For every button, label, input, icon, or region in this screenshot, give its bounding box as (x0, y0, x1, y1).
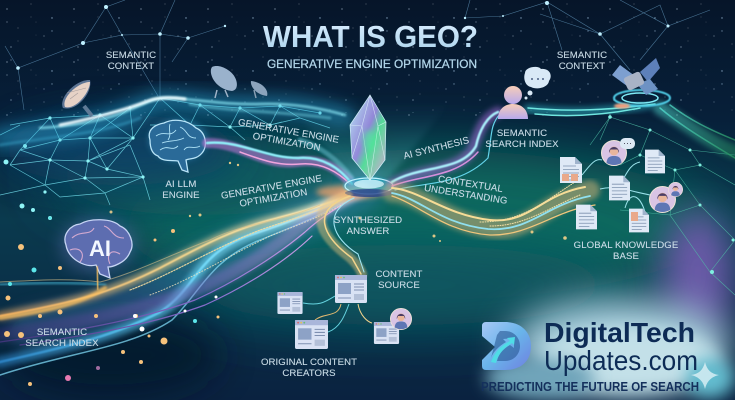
label: semantic context left: SEMANTIC (106, 50, 156, 61)
label: contextual understanding: UNDERSTANDING (423, 183, 508, 207)
label: AI LLM engine: ENGINE (162, 190, 200, 201)
icon: satellite dish centre (211, 66, 237, 98)
central beam (286, 100, 452, 180)
label: semantic search index left: SEARCH INDEX (25, 338, 99, 349)
icon: avatar small (668, 182, 683, 197)
icon: LLM brain (148, 118, 208, 172)
document 1 (560, 157, 582, 183)
icon: documents cluster (560, 150, 665, 232)
label: content source: CONTENT (375, 269, 423, 280)
label: AI LLM engine: AI LLM (166, 179, 196, 190)
icon: user with speech bubble (498, 67, 551, 119)
stream: centre to content sources (321, 196, 364, 274)
label: original content creators: CREATORS (282, 368, 336, 379)
label: generative engine optimization lower: GENERATIVE ENGINE (220, 173, 323, 202)
label: semantic search index left: SEMANTIC (37, 327, 87, 338)
icon: satellite dish right (251, 81, 267, 98)
label: semantic context right: CONTEXT (559, 61, 605, 72)
logo mark (482, 322, 531, 370)
document 5 (629, 209, 649, 232)
icon: avatar man (650, 187, 675, 212)
label: global knowledge base: GLOBAL KNOWLEDGE (574, 240, 678, 251)
icon: window left (277, 292, 303, 314)
stream: crystal to user (392, 112, 500, 190)
mesh nodes left (4, 103, 322, 220)
brain label AI: AI (89, 236, 111, 261)
title: WHAT IS GEO? (263, 19, 478, 54)
label: AI synthesis: AI SYNTHESIS (402, 135, 470, 162)
stream: brain to crystal (207, 140, 352, 184)
icon: crystal (350, 95, 386, 180)
icon: window centre (335, 275, 367, 303)
logo wordmark: DigitalTech (544, 317, 695, 348)
stream: main left to centre (0, 188, 362, 375)
tagline: PREDICTING THE FUTURE OF SEARCH (481, 380, 699, 394)
document 4 (576, 205, 597, 229)
label: global knowledge base: BASE (613, 251, 639, 262)
network mesh right (590, 117, 735, 295)
logo wordmark: Updates.com (544, 345, 698, 376)
document 2 (645, 150, 665, 173)
label: semantic context left: CONTEXT (108, 61, 154, 72)
icon: window lower (295, 320, 328, 349)
constellation top (5, 0, 710, 110)
logo wordmark (544, 317, 698, 376)
icon: sparkle (691, 362, 719, 389)
document 3 (609, 176, 630, 200)
icon: satellite (612, 58, 660, 95)
label: generative engine optimization upper: OPTIMIZATION (252, 131, 321, 154)
stream: user to satellite (528, 90, 670, 116)
label: content source: SOURCE (378, 280, 420, 291)
subtitle: GENERATIVE ENGINE OPTIMIZATION (267, 59, 477, 71)
constellation nodes (16, 1, 669, 70)
stream: right green (660, 105, 735, 158)
label: synthesized answer: SYNTHESIZED (334, 215, 402, 226)
knowledge base links (582, 160, 650, 212)
label: semantic context right: SEMANTIC (557, 50, 607, 61)
icon: satellite dish left (62, 80, 92, 116)
base disc (343, 177, 395, 197)
stream: contextual gold (392, 182, 595, 235)
mesh nodes right (608, 115, 734, 274)
icon: avatar creator (390, 308, 412, 330)
label: generative engine optimization upper: GENERATIVE ENGINE (237, 117, 340, 146)
label: generative engine optimization lower: OPTIMIZATION (239, 187, 308, 210)
stream: disc glow (316, 185, 384, 199)
label: semantic search index right: SEARCH INDEX (485, 139, 559, 150)
label: original content creators: ORIGINAL CONTENT (261, 357, 357, 368)
icon: window right (374, 322, 399, 344)
glowing particles (4, 162, 567, 386)
icon: avatar woman (602, 138, 635, 166)
wave ridge (0, 98, 345, 145)
icon: AI brain (60, 217, 136, 290)
label: semantic search index right: SEMANTIC (497, 128, 547, 139)
label: synthesized answer: ANSWER (347, 226, 389, 237)
network mesh left (0, 98, 330, 205)
content source links (303, 296, 372, 332)
label: contextual understanding: CONTEXTUAL (437, 174, 504, 195)
